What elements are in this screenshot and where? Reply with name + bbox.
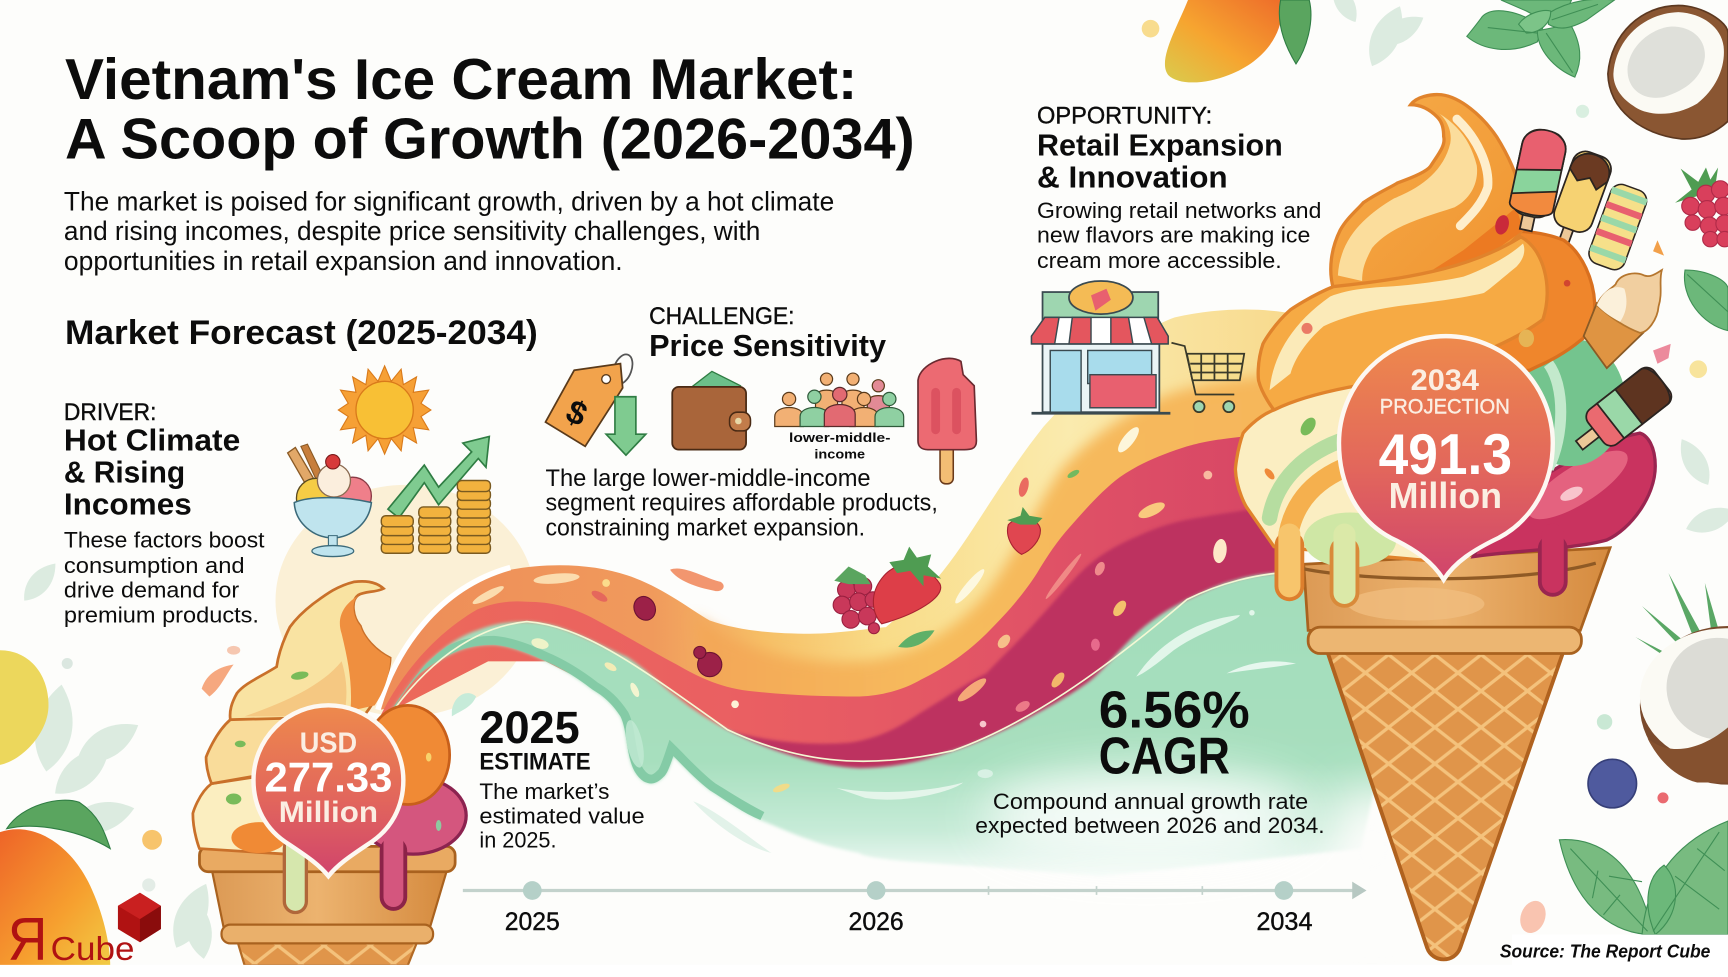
green drip <box>284 849 307 902</box>
waffle base <box>238 943 417 965</box>
opportunity block <box>1037 102 1321 273</box>
magenta gloss <box>1558 484 1585 504</box>
opportunity block: & Innovation <box>1037 159 1228 194</box>
CAGR block: CAGR <box>1099 727 1230 785</box>
logo text: Я <box>8 905 47 973</box>
driver block: DRIVER: <box>64 399 156 426</box>
second scoop cream strip <box>1270 244 1524 390</box>
intro paragraph <box>64 186 834 276</box>
CAGR block <box>975 680 1325 838</box>
people icon caption <box>789 430 890 461</box>
mint leaf right <box>1684 270 1728 331</box>
pin label: USD: USD <box>300 728 357 760</box>
intro paragraph: opportunities in retail expansion and innovation. <box>64 246 623 276</box>
blueberry <box>1588 759 1637 808</box>
lemon left <box>0 650 48 765</box>
icon: price tag: $ <box>560 393 592 434</box>
swirl deep orange wedge <box>1424 207 1523 276</box>
waffle cone <box>1327 650 1564 959</box>
people icon caption: lower-middle- <box>789 430 890 445</box>
strawberry small <box>1008 518 1040 554</box>
mint top right <box>1467 0 1614 77</box>
green scoop stripe <box>1548 364 1561 468</box>
2025 estimate block: The market’s <box>479 779 609 804</box>
swirl cream sweep <box>245 661 346 716</box>
red berry <box>1493 214 1511 236</box>
icon: ice cream store <box>1032 281 1170 413</box>
orange scoop <box>366 705 450 805</box>
lower green swirl <box>1304 512 1396 568</box>
bottom white strip <box>0 965 1728 977</box>
people icon caption: income <box>814 446 865 461</box>
swirl cream lobe <box>1338 114 1477 281</box>
ribbon: gold band <box>694 373 1295 794</box>
driver block: consumption and <box>64 553 245 578</box>
ribbon highlights and droplets <box>471 424 1296 853</box>
small leaf <box>898 630 935 648</box>
swirl orange stripe <box>340 595 390 711</box>
intro paragraph: and rising incomes, despite price sensitivity challenges, with <box>64 216 760 246</box>
lower band <box>222 925 433 943</box>
ribbon: white outline <box>378 568 510 710</box>
pin year: 2034 <box>1411 364 1479 397</box>
title: A Scoop of Growth (2026-2034) <box>65 108 915 172</box>
timeline node 2025 <box>523 881 542 900</box>
pin value: 491.3 <box>1379 423 1512 487</box>
mango leaf <box>7 800 110 849</box>
timeline node 2026 <box>867 881 885 900</box>
third layer scoop <box>193 771 292 854</box>
title <box>65 48 915 172</box>
CAGR block: 6.56% <box>1099 680 1250 738</box>
coconut flesh <box>1613 12 1724 114</box>
challenge heading <box>649 303 886 363</box>
scoop sprinkles <box>1302 280 1570 347</box>
opportunity block: OPPORTUNITY: <box>1037 102 1212 129</box>
opportunity block: cream more accessible. <box>1037 248 1282 273</box>
icon: down arrow <box>606 397 646 455</box>
value pin 2034 <box>1339 336 1553 580</box>
pink scoop <box>360 777 466 854</box>
magenta scoop <box>1473 433 1655 557</box>
orange ball <box>1389 231 1595 380</box>
coconut top right <box>1608 6 1728 139</box>
driver block: These factors boost <box>64 528 265 553</box>
seeds <box>226 670 309 805</box>
logo: RCube: Cube <box>51 931 134 968</box>
logo cube <box>118 893 161 942</box>
popsicle chocolate top <box>1542 148 1615 260</box>
2025 estimate block: estimated value <box>479 803 645 828</box>
driver block: drive demand for <box>64 577 240 602</box>
icon: wallet <box>672 371 750 450</box>
challenge paragraph: The large lower-middle-income <box>546 466 871 492</box>
ribbon: green band <box>380 572 1391 876</box>
lower band <box>1308 627 1581 654</box>
coconut center <box>1628 26 1705 98</box>
strawberries and raspberry <box>833 507 1043 648</box>
timeline label 2026: 2026 <box>849 908 904 936</box>
ribbon: green lower shade <box>384 645 760 820</box>
timeline arrow <box>1352 882 1367 899</box>
white fade near large cone <box>1330 788 1414 909</box>
mint bottom right <box>1559 821 1728 935</box>
opportunity block: Growing retail networks and <box>1037 198 1321 223</box>
orange and pink seeds <box>426 753 441 831</box>
icon: price tag <box>546 352 636 446</box>
cup <box>212 868 447 928</box>
pin unit: Million: Million <box>279 796 378 829</box>
opportunity block: Retail Expansion <box>1037 127 1283 162</box>
green scoop <box>1515 338 1626 466</box>
challenge paragraph <box>546 466 938 542</box>
raspberry right <box>1675 168 1728 247</box>
icon: sun <box>338 366 431 454</box>
challenge paragraph: segment requires affordable products, <box>546 490 938 516</box>
opportunity block: new flavors are making ice <box>1037 222 1310 247</box>
value pin 2025 <box>253 705 403 876</box>
palm leaves and coconut lower right <box>1635 573 1728 785</box>
pin value: 277.33: 277.33 <box>264 753 392 800</box>
icon: people group <box>775 373 904 427</box>
strawberry large <box>873 565 941 624</box>
awning <box>1032 317 1168 344</box>
orange drip <box>1276 546 1303 586</box>
CAGR block: Compound annual growth rate <box>993 789 1308 814</box>
large ice cream cone 2034 <box>1235 95 1675 959</box>
title: Vietnam's Ice Cream Market: <box>65 48 857 112</box>
challenge paragraph: constraining market expansion. <box>546 516 865 542</box>
mini cone <box>1584 270 1662 368</box>
magenta inner highlight <box>1520 439 1637 531</box>
timeline label 2025: 2025 <box>505 908 560 936</box>
ribbon: top orange to pale yellow band <box>380 310 1295 794</box>
raspberry <box>833 566 881 634</box>
icon: growth arrow <box>388 436 489 518</box>
2025 estimate block: in 2025. <box>479 828 557 853</box>
logo: RCube <box>8 893 161 973</box>
seeds on third scoop <box>1263 415 1319 481</box>
timeline <box>463 881 1367 936</box>
2025 estimate block: 2025 <box>479 702 580 753</box>
CAGR block: expected between 2026 and 2034. <box>975 813 1325 838</box>
swirl pale stripe <box>1457 119 1488 226</box>
small ice cream cone 2025 <box>193 581 466 965</box>
icon: shopping cart <box>1171 343 1244 412</box>
popsicle chocolate green pink <box>1566 364 1675 463</box>
popsicle striped <box>1586 181 1650 273</box>
icon: bitten popsicle <box>918 358 976 484</box>
second scoop body <box>1258 237 1547 410</box>
rim line <box>1303 563 1596 579</box>
third scoop <box>1235 375 1444 562</box>
intro paragraph: The market is poised for significant growth, driven by a hot climate <box>64 186 834 216</box>
second layer scoop <box>206 715 287 784</box>
mango top <box>1165 0 1311 82</box>
top swirl <box>230 581 390 720</box>
mango leaf <box>1279 0 1311 64</box>
orange stripe <box>1287 463 1358 542</box>
white glow behind CAGR <box>981 769 1311 862</box>
popsicle pink green orange <box>1505 126 1569 235</box>
rim <box>199 846 455 872</box>
flowing growth ribbon <box>378 310 1414 909</box>
top swirl body <box>1331 95 1525 289</box>
driver block <box>64 399 265 628</box>
magenta drip <box>1539 549 1566 582</box>
ribbon: red band <box>380 432 1295 794</box>
mango bottom left <box>0 800 110 965</box>
green stripe <box>1270 439 1347 518</box>
icon: sundae <box>288 444 371 557</box>
magenta drip <box>381 851 406 897</box>
ribbon: cream edge <box>380 572 1295 761</box>
driver block: Hot Climate <box>64 423 240 458</box>
timeline label 2034: 2034 <box>1256 908 1313 936</box>
driver block: & Rising <box>64 455 185 490</box>
market forecast heading: Market Forecast (2025-2034) <box>65 314 538 352</box>
driver block: Incomes <box>64 487 192 522</box>
icon: coin stacks <box>381 481 490 553</box>
timeline node 2034 <box>1275 881 1293 900</box>
source box: Source: The Report Cube <box>1500 942 1710 962</box>
driver block: premium products. <box>64 603 259 628</box>
green drip <box>1331 551 1358 593</box>
2025 estimate block <box>479 702 645 853</box>
pin label: PROJECTION <box>1380 395 1510 418</box>
cup highlight <box>1348 587 1484 620</box>
2025 estimate block: ESTIMATE <box>479 748 591 775</box>
challenge heading: Price Sensitivity <box>649 330 886 363</box>
lower orange patch <box>231 822 287 853</box>
pin unit: Million <box>1389 475 1502 516</box>
challenge heading: CHALLENGE: <box>649 303 795 330</box>
source box <box>1500 935 1728 976</box>
berries on ribbon <box>630 593 722 677</box>
cup <box>1304 548 1610 630</box>
ribbon: magenta band <box>716 505 1295 794</box>
